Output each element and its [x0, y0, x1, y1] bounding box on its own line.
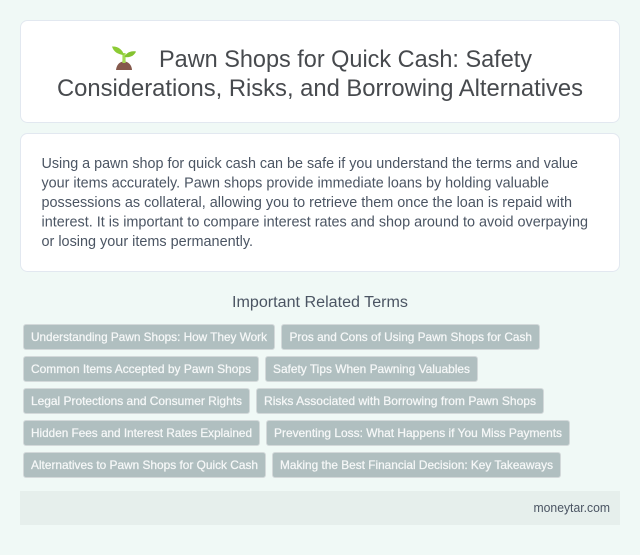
tag: Preventing Loss: What Happens if You Miss Payments	[274, 426, 562, 440]
tag: Making the Best Financial Decision: Key Takeaways	[280, 458, 553, 472]
tag: Pros and Cons of Using Pawn Shops for Cash	[290, 330, 532, 344]
footer	[20, 491, 620, 525]
intro paragraph: or losing your items permanently.	[42, 234, 253, 250]
title	[57, 46, 583, 102]
footer: moneytar.com	[534, 501, 610, 515]
panel: intro text card	[20, 134, 620, 272]
tag	[24, 388, 250, 414]
tag: Common Items Accepted by Pawn Shops	[31, 362, 251, 376]
tag: Hidden Fees and Interest Rates Explained	[31, 426, 252, 440]
tag	[266, 420, 570, 446]
tag	[266, 356, 478, 382]
tag	[272, 452, 560, 478]
intro paragraph: possessions as collateral, allowing you to retrieve them once the loan is repaid with	[42, 195, 572, 211]
icon: sprout	[112, 46, 136, 70]
tag: Alternatives to Pawn Shops for Quick Cash	[31, 458, 258, 472]
title: Considerations, Risks, and Borrowing Alternatives	[57, 75, 583, 102]
intro paragraph: Using a pawn shop for quick cash can be safe if you understand the terms and value	[42, 156, 578, 172]
tag: Safety Tips When Pawning Valuables	[273, 362, 470, 376]
heading: related terms: Important Related Terms	[232, 294, 408, 311]
intro paragraph: your items accurately. Pawn shops provide immediate loans by holding valuable	[42, 176, 549, 192]
panel: title card	[20, 20, 620, 122]
intro paragraph	[42, 156, 588, 250]
tag	[256, 388, 544, 414]
tag: Risks Associated with Borrowing from Pawn Shops	[264, 394, 536, 408]
tag	[24, 420, 260, 446]
intro paragraph: interest. It is important to compare interest rates and shop around to avoid overpaying	[42, 214, 588, 230]
tag: Legal Protections and Consumer Rights	[31, 394, 242, 408]
tag	[24, 356, 258, 382]
tag	[282, 324, 540, 350]
title: Pawn Shops for Quick Cash: Safety	[159, 46, 533, 73]
tag: Understanding Pawn Shops: How They Work	[31, 330, 268, 344]
tag	[24, 324, 274, 350]
tag list	[24, 324, 570, 478]
tag	[24, 452, 266, 478]
